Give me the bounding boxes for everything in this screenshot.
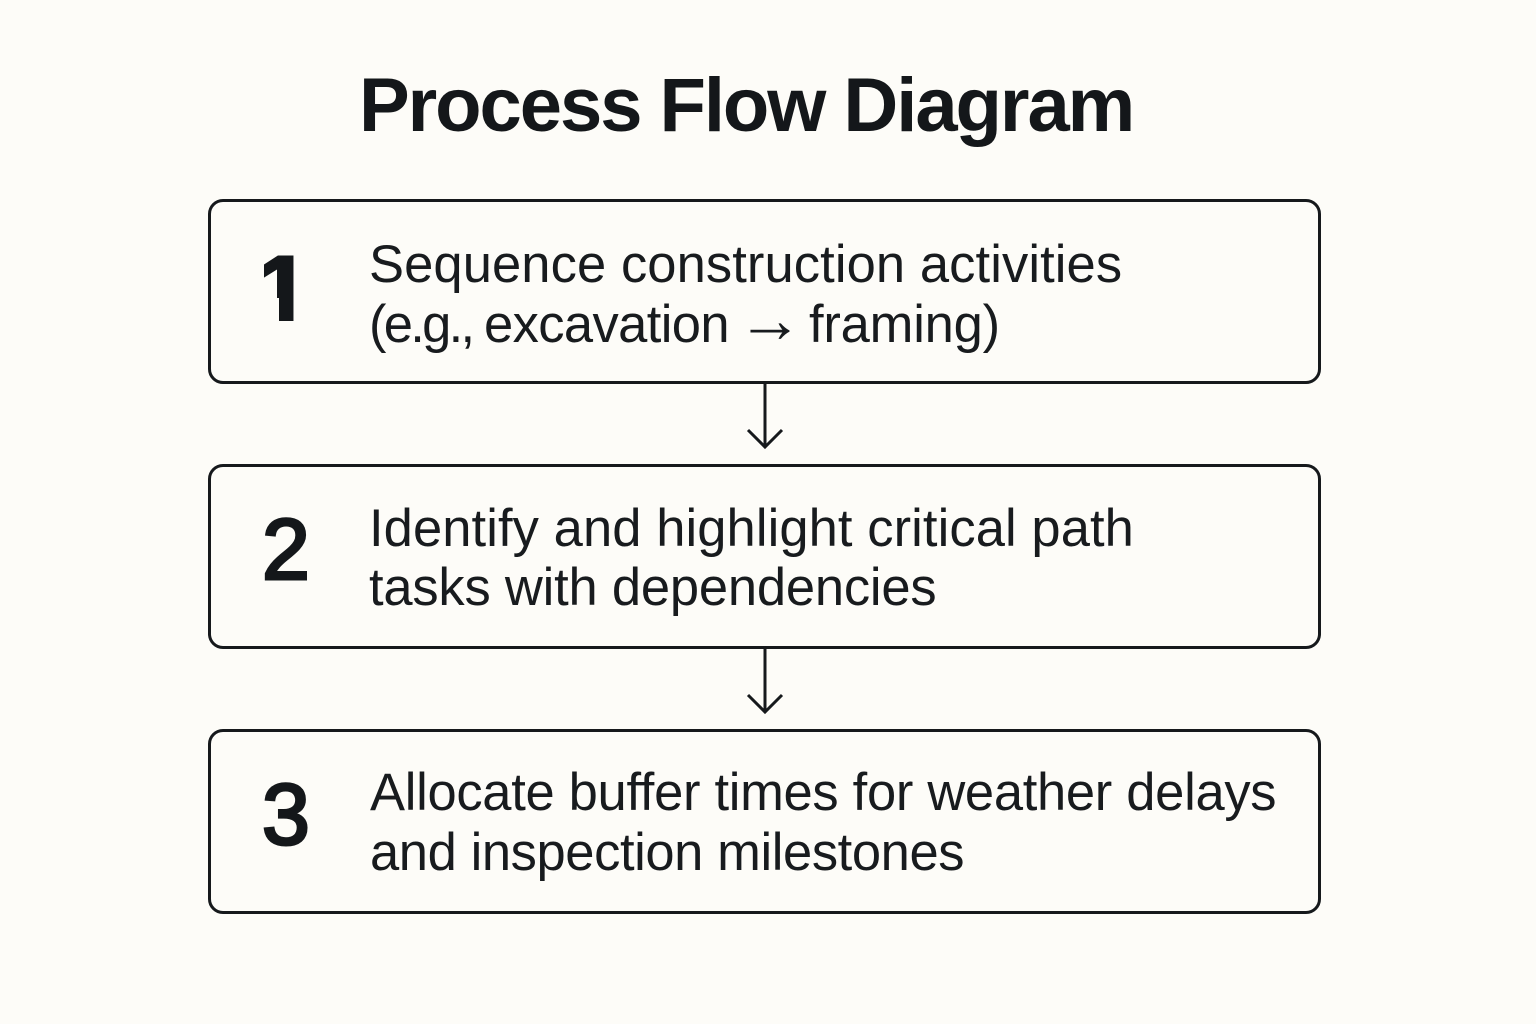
step 1 text: → — [737, 282, 803, 356]
step 1 text: framing) — [809, 295, 1000, 354]
panel: step 1 — [208, 199, 1321, 384]
step 1 text: Sequence construction activities — [369, 235, 1122, 294]
step 2 text — [369, 499, 1134, 617]
step 2 text: tasks with dependencies — [369, 558, 936, 617]
step 3 text: and inspection milestones — [370, 823, 964, 882]
step 1 text: excavation — [484, 295, 729, 354]
arrow: step 2 to step 3 — [747, 649, 783, 714]
step 2 text: Identify and highlight critical path — [369, 499, 1134, 558]
step 1 text — [369, 235, 1122, 356]
panel: step 3 — [208, 729, 1321, 914]
step number 3: 3 — [262, 767, 310, 863]
panel: step 2 — [208, 464, 1321, 649]
step number 2: 2 — [262, 502, 310, 598]
arrow: step 1 to step 2 — [747, 384, 783, 450]
step 1 text: (e.g., — [369, 295, 472, 354]
step 3 text: Allocate buffer times for weather delays — [370, 763, 1276, 822]
step 3 text — [370, 763, 1276, 882]
title: Process Flow Diagram — [359, 63, 1133, 148]
